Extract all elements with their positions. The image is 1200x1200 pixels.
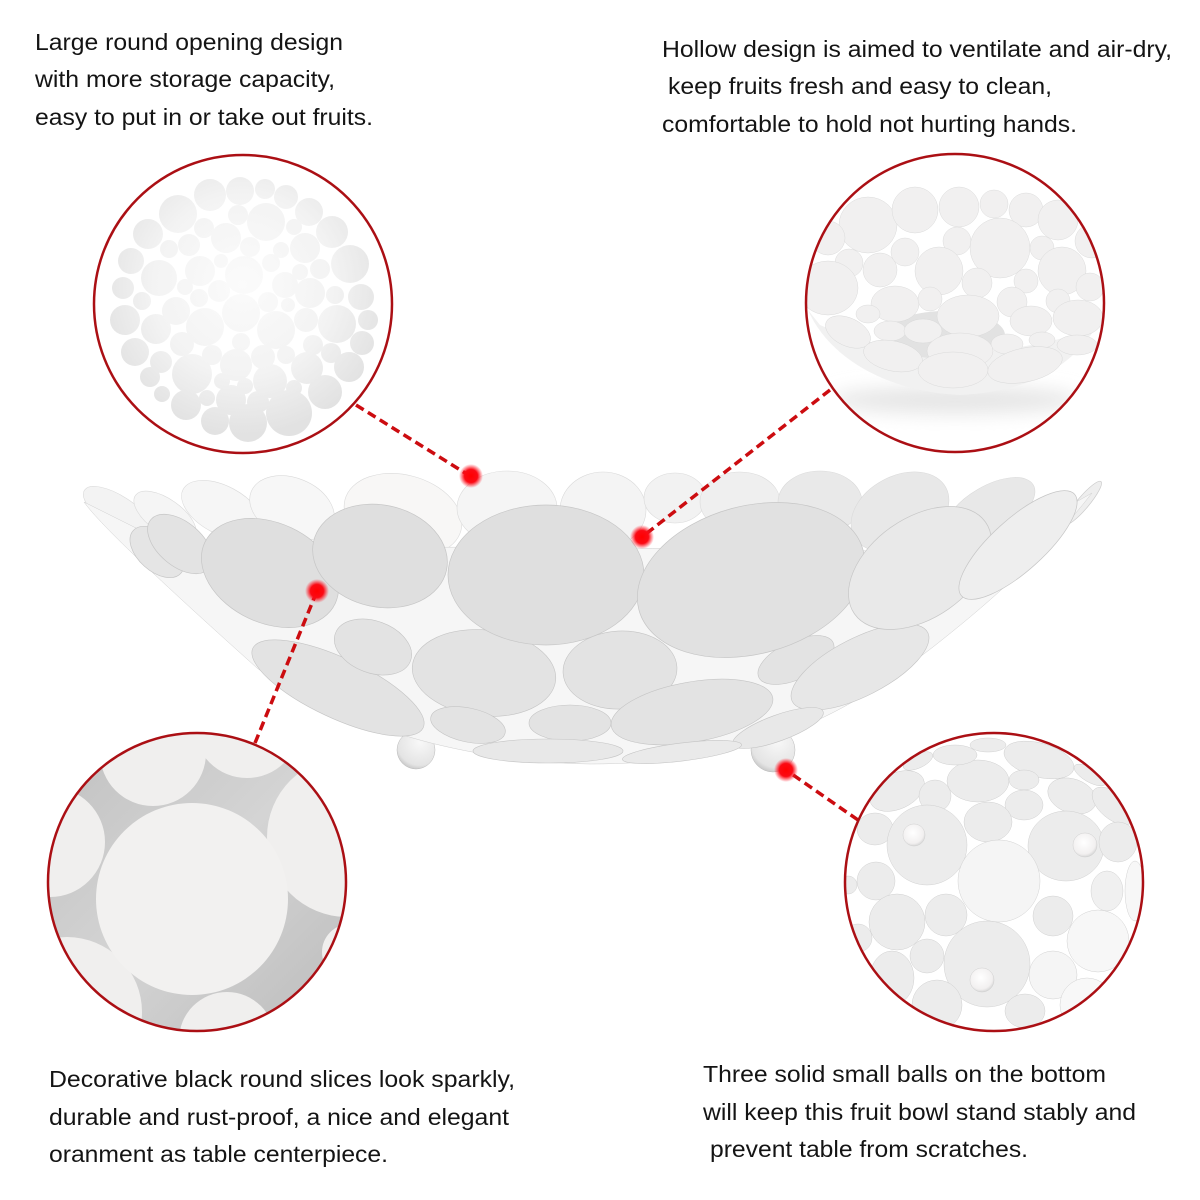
text: decorative slices: oranment as table centerpiece. — [49, 1141, 388, 1167]
connector: bottom left — [255, 579, 329, 743]
text: hollow design: Hollow design is aimed to ventilate and air-dry, — [662, 36, 1172, 62]
connector: bottom right — [774, 758, 858, 820]
text: hollow design: keep fruits fresh and easy to clean, — [668, 73, 1052, 99]
text: opening design: with more storage capacity, — [34, 66, 335, 92]
feet — [397, 728, 795, 772]
text: small balls: prevent table from scratches. — [710, 1136, 1028, 1162]
text: small balls: will keep this fruit bowl stand stably and — [702, 1099, 1136, 1125]
connector: top left — [356, 405, 483, 488]
back rim discs — [76, 456, 1045, 569]
text: opening design: easy to put in or take out fruits. — [35, 104, 373, 130]
lower discs — [240, 607, 941, 768]
shadow under bowl — [830, 386, 1080, 414]
fruit bowl — [76, 456, 1106, 772]
tip — [1060, 478, 1106, 528]
text: decorative slices: durable and rust-proof, a nice and elegant — [49, 1104, 510, 1130]
bowl body — [84, 493, 1092, 764]
text: hollow design: comfortable to hold not hurting hands. — [662, 111, 1077, 137]
text: decorative slices — [49, 1066, 515, 1167]
connector: top right — [630, 390, 830, 549]
text: small balls: Three solid small balls on the bottom — [703, 1061, 1106, 1087]
text: small balls — [702, 1061, 1136, 1162]
text: opening design — [34, 29, 373, 130]
inset: disc close-up — [46, 732, 348, 1032]
front discs — [121, 475, 1092, 682]
text: decorative slices: Decorative black round slices look sparkly, — [49, 1066, 515, 1092]
inset: side view hollow — [798, 154, 1109, 452]
inset: top view of bowl — [94, 155, 392, 453]
inset: bottom view with balls — [839, 733, 1145, 1032]
text: opening design: Large round opening design — [35, 29, 343, 55]
text: hollow design — [662, 36, 1172, 137]
